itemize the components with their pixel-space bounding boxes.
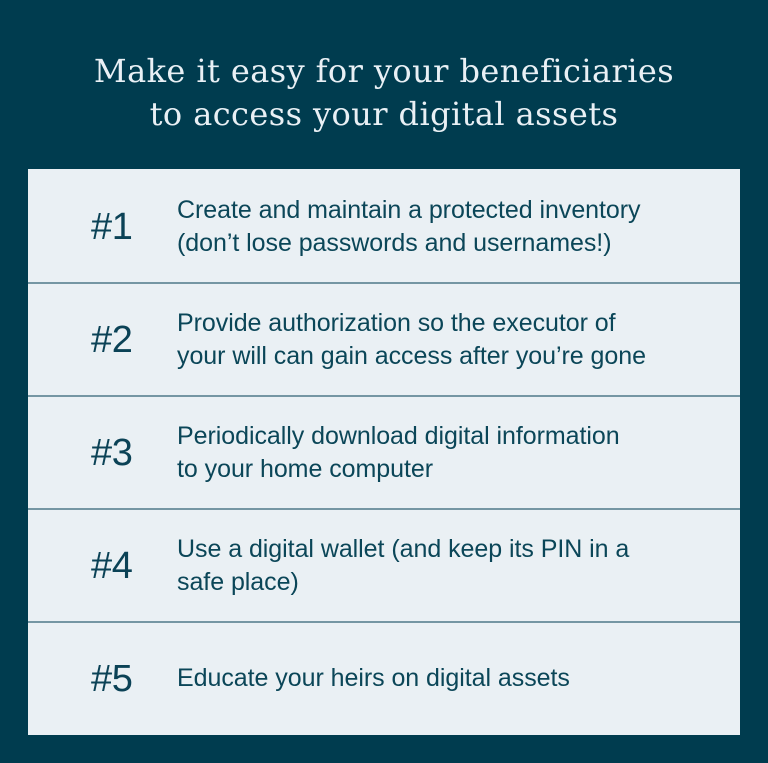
tip 4 [91,535,630,596]
tip 2 text: your will can gain access after you’re gone [177,342,646,370]
tip 4 text: safe place) [177,568,299,596]
tip 3 text [177,422,620,483]
tip 3 [91,422,620,483]
tip 4 text [177,535,630,596]
tip 2 text: Provide authorization so the executor of [177,309,616,337]
number 5: #5 [91,658,132,700]
number 1: #1 [91,206,132,248]
tip 1 [91,196,641,257]
panel: list of five tips [28,169,740,735]
title: Make it easy for your beneficiaries [94,52,674,90]
title [94,52,674,133]
tip 2 text [177,309,646,370]
tip 1 text [177,196,641,257]
tip 3 text: to your home computer [177,455,433,483]
tip 2 [91,309,646,370]
tip 3 text: Periodically download digital information [177,422,620,450]
number 4: #4 [91,545,132,587]
tip 1 text: Create and maintain a protected inventory [177,196,641,224]
number 3: #3 [91,432,132,474]
tip 5 [91,658,570,700]
tip 1 text: (don’t lose passwords and usernames!) [177,229,611,257]
title: to access your digital assets [150,95,618,133]
tip 4 text: Use a digital wallet (and keep its PIN in a [177,535,629,563]
tip 5 text: Educate your heirs on digital assets [177,664,570,692]
number 2: #2 [91,319,132,361]
